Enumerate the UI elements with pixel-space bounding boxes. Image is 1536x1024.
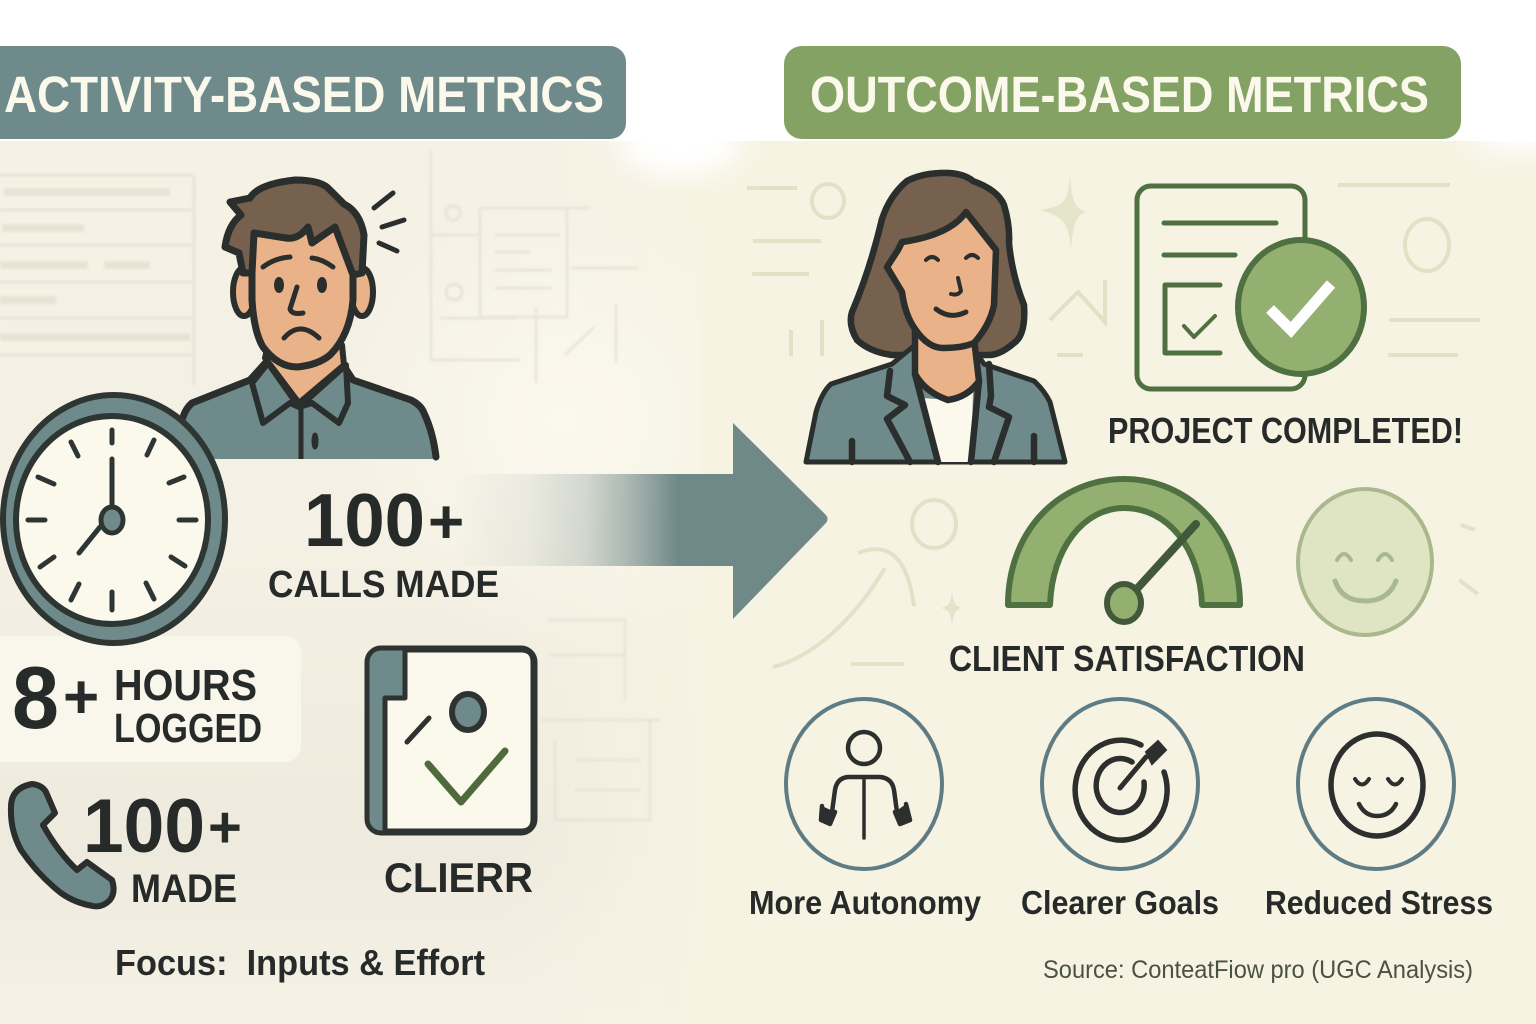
header: outcome-based metrics: OUTCOME-BASED METRICS — [810, 66, 1429, 123]
icon: document with check — [367, 648, 535, 833]
man: expression — [263, 193, 404, 338]
label: more autonomy: More Autonomy — [749, 884, 982, 921]
man: shirt — [183, 360, 437, 459]
background: right panel — [702, 141, 1536, 1024]
label: project completed: PROJECT COMPLETED! — [1108, 410, 1463, 451]
icon: completed document with check badge — [1137, 186, 1364, 389]
stat: 100+ calls made — [268, 478, 499, 606]
stat: 8+ hours logged: LOGGED — [114, 705, 262, 751]
illustration: stressed man — [183, 180, 437, 459]
chart: satisfaction gauge — [1008, 479, 1240, 622]
stat: 8+ hours logged — [0, 636, 301, 762]
stat: 100+ made: 100 — [83, 784, 205, 869]
woman: neck — [915, 330, 979, 400]
woman: jacket — [806, 345, 1065, 462]
stat: 8+ hours logged: 8 — [12, 648, 59, 747]
background: white notch between panels — [618, 104, 1536, 176]
illustration: smiling woman — [806, 173, 1065, 462]
background: left panel — [0, 141, 705, 1024]
stat: 100+ made — [83, 784, 242, 911]
icon: clock — [3, 395, 225, 643]
header: outcome-based metrics — [784, 46, 1461, 139]
stat: 100+ calls made: CALLS MADE — [268, 564, 499, 606]
label: clierr: CLIERR — [384, 854, 533, 901]
icon: clearer goals — [1042, 699, 1198, 869]
icon: reduced stress — [1298, 699, 1454, 869]
woman: hair — [851, 173, 1024, 355]
stat: 8+ hours logged: HOURS — [114, 661, 257, 710]
man: face — [252, 210, 353, 367]
stat: 100+ calls made: 100 — [304, 478, 425, 562]
background sketch: left dashboard — [0, 150, 660, 820]
label: clearer goals: Clearer Goals — [1021, 884, 1219, 921]
label: client satisfaction: CLIENT SATISFACTION — [949, 638, 1305, 679]
background sketch: right doodles — [747, 175, 1480, 667]
source note: Source: ConteatFiow pro (UGC Analysis) — [1043, 956, 1473, 984]
man: hair — [225, 180, 364, 275]
icon: more autonomy — [786, 699, 942, 869]
stat: 100+ calls made: + — [428, 488, 464, 557]
stat: 100+ made: MADE — [131, 867, 237, 911]
icon: phone handset — [11, 784, 114, 906]
label: reduced stress: Reduced Stress — [1265, 884, 1493, 921]
man: ears — [233, 268, 255, 316]
man: collar — [252, 363, 348, 423]
icon: faded smiley — [1298, 489, 1432, 635]
woman: expression — [926, 255, 978, 315]
header: activity-based metrics: ACTIVITY-BASED METRICS — [4, 66, 604, 123]
woman: face — [887, 212, 996, 348]
stat: 8+ hours logged: + — [63, 663, 99, 732]
stat: 100+ made: + — [208, 795, 242, 860]
arrow: activity to outcome — [450, 423, 828, 619]
woman: lapels — [852, 364, 1034, 462]
label: focus: Focus: Inputs & Effort — [115, 942, 485, 983]
woman: shirt — [923, 391, 973, 462]
header: activity-based metrics — [0, 46, 626, 139]
